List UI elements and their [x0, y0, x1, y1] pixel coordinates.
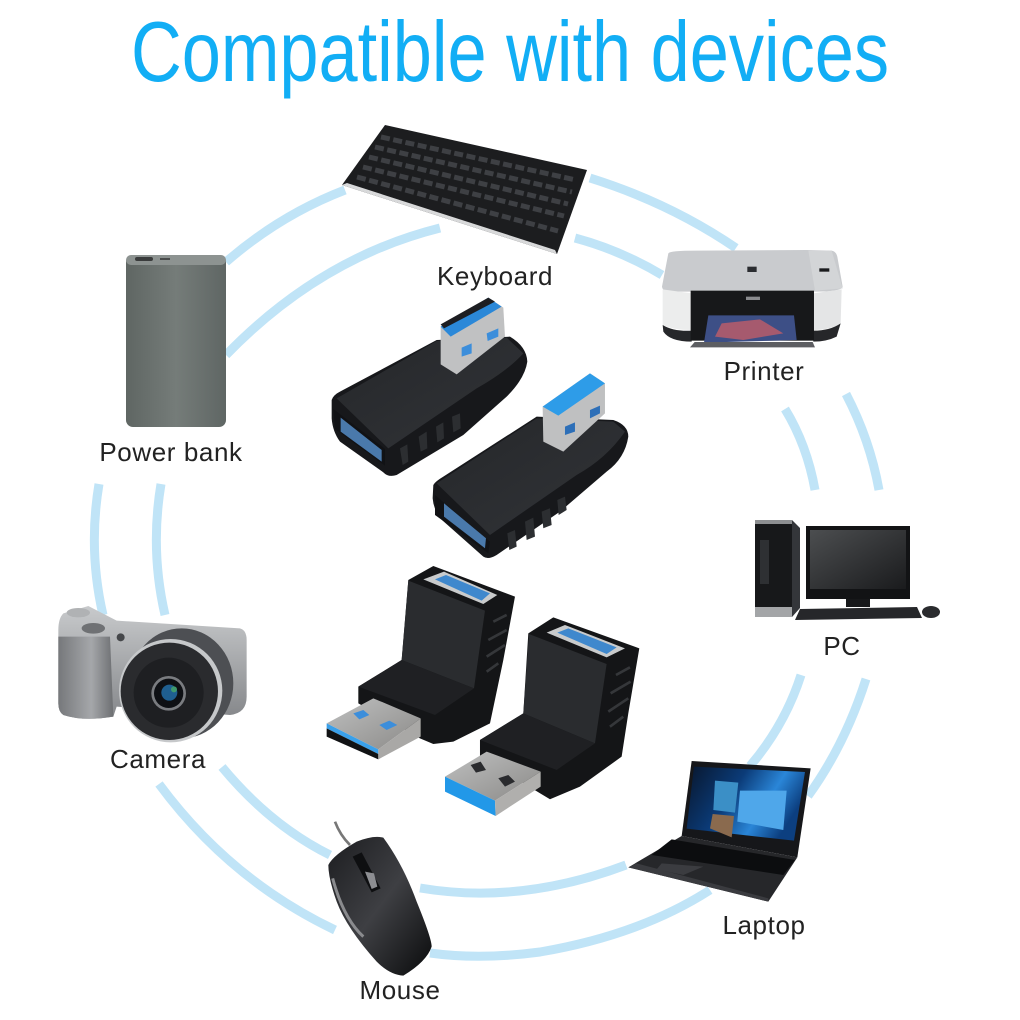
label: Mouse: Mouse	[359, 975, 441, 1005]
icon: mouse	[328, 822, 432, 976]
icon: keyboard	[342, 125, 587, 254]
label: Power bank: Power bank	[99, 437, 243, 467]
keyboard and mouse	[795, 606, 940, 620]
label: Keyboard: Keyboard	[437, 261, 553, 291]
icon: power bank	[126, 255, 226, 427]
icon: lower adapter pair (up-angled USB)	[327, 566, 639, 816]
monitor	[806, 526, 910, 607]
adapter: rear lower	[327, 566, 515, 759]
adapter: front lower	[445, 617, 639, 816]
tower	[755, 520, 800, 617]
icon: upper adapter pair (angled USB)	[332, 298, 628, 558]
label: Camera: Camera	[110, 744, 206, 774]
icon: camera	[58, 606, 247, 742]
label: PC: PC	[823, 631, 861, 661]
icon: printer	[662, 250, 843, 347]
connection arcs: outer and inner rings	[94, 178, 879, 956]
adapter: rear upper	[332, 298, 527, 476]
icon: PC	[755, 520, 940, 620]
adapter: front upper	[433, 373, 628, 558]
label: Laptop: Laptop	[722, 910, 806, 940]
label: Printer: Printer	[724, 356, 804, 386]
icon: laptop	[628, 761, 811, 902]
